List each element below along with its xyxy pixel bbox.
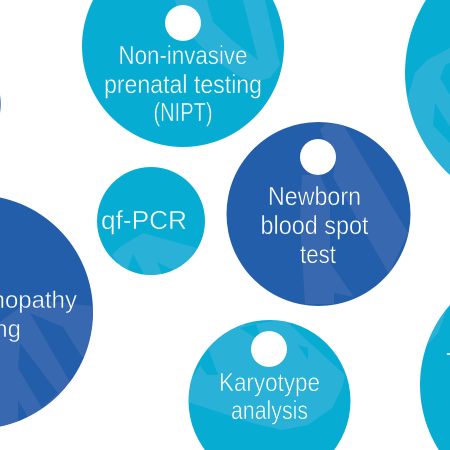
label: Non-invasive prenatal testing (NIPT): prenatal testing xyxy=(104,69,262,99)
label: Newborn blood spot test: blood spot xyxy=(260,210,369,240)
panel: circle at top right xyxy=(405,0,450,175)
panel: Newborn blood spot test circle xyxy=(226,122,410,306)
label: Newborn blood spot test: test xyxy=(300,239,337,269)
label: Karyotype analysis: analysis xyxy=(231,395,308,425)
label: Karyotype analysis: Karyotype xyxy=(219,367,320,397)
label: Non-invasive prenatal testing (NIPT): (NIPT) xyxy=(154,97,212,127)
panel: Haemoglobinopathy screening circle xyxy=(0,198,93,426)
label: Non-invasive prenatal testing (NIPT) xyxy=(104,40,262,127)
panel: circle at bottom right xyxy=(420,305,450,450)
panel: Non-invasive prenatal testing circle xyxy=(82,0,284,147)
label: Non-invasive prenatal testing (NIPT): Non-invasive xyxy=(118,40,248,70)
icon: punched hole xyxy=(300,139,336,175)
panel: Karyotype analysis circle xyxy=(188,320,350,450)
icon: punched hole xyxy=(251,331,287,367)
panel: qf-PCR circle xyxy=(97,167,205,278)
label: Karyotype analysis xyxy=(219,367,320,425)
icon: punched hole xyxy=(165,5,201,41)
label: Newborn blood spot test xyxy=(260,181,369,269)
label: Newborn blood spot test: Newborn xyxy=(268,181,361,211)
panel: edge of partly hidden circle at left xyxy=(0,63,1,145)
label: qf-PCR: qf-PCR xyxy=(101,205,187,235)
label: Haemoglobinopathy screening xyxy=(0,287,77,343)
